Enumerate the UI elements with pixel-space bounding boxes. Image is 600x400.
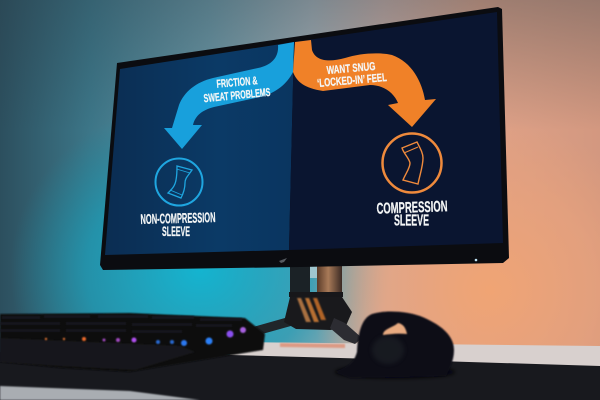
arrow: orange, to compression sleeve <box>293 40 436 127</box>
label: want snug locked-in feel <box>317 61 387 90</box>
panel: left screen half (non-compression) <box>105 42 294 255</box>
keyboard <box>0 313 265 372</box>
label: compression sleeve: SLEEVE <box>394 212 429 230</box>
icon: monitor logo <box>279 258 287 263</box>
monitor bezel <box>100 7 509 270</box>
mouse <box>335 312 455 378</box>
label: friction and sweat problems: FRICTION & <box>216 75 258 91</box>
label: friction and sweat problems: SWEAT PROBLEMS <box>203 87 271 105</box>
label: want snug locked-in feel: ‘LOCKED-IN’ FEEL <box>317 72 387 90</box>
label: compression sleeve <box>376 198 448 230</box>
keys <box>0 315 242 333</box>
mouse logo glow <box>383 323 407 335</box>
wrist rest <box>0 338 195 370</box>
label: friction and sweat problems <box>203 75 271 105</box>
label: non-compression sleeve <box>140 209 216 239</box>
power LED <box>475 259 477 261</box>
label: compression sleeve: COMPRESSION <box>376 198 448 218</box>
label: non-compression sleeve: NON-COMPRESSION <box>140 209 216 227</box>
keyboard RGB lights <box>45 327 246 346</box>
arrow: blue, to non-compression sleeve <box>164 42 294 149</box>
panel: right screen half (compression) <box>289 12 503 250</box>
icon: compression sleeve <box>382 134 442 192</box>
monitor <box>100 7 509 270</box>
desk surface <box>0 342 600 400</box>
icon: non-compression sleeve <box>156 158 202 206</box>
monitor stand <box>246 266 362 344</box>
label: non-compression sleeve: SLEEVE <box>162 223 190 239</box>
label: want snug locked-in feel: WANT SNUG <box>326 61 376 77</box>
